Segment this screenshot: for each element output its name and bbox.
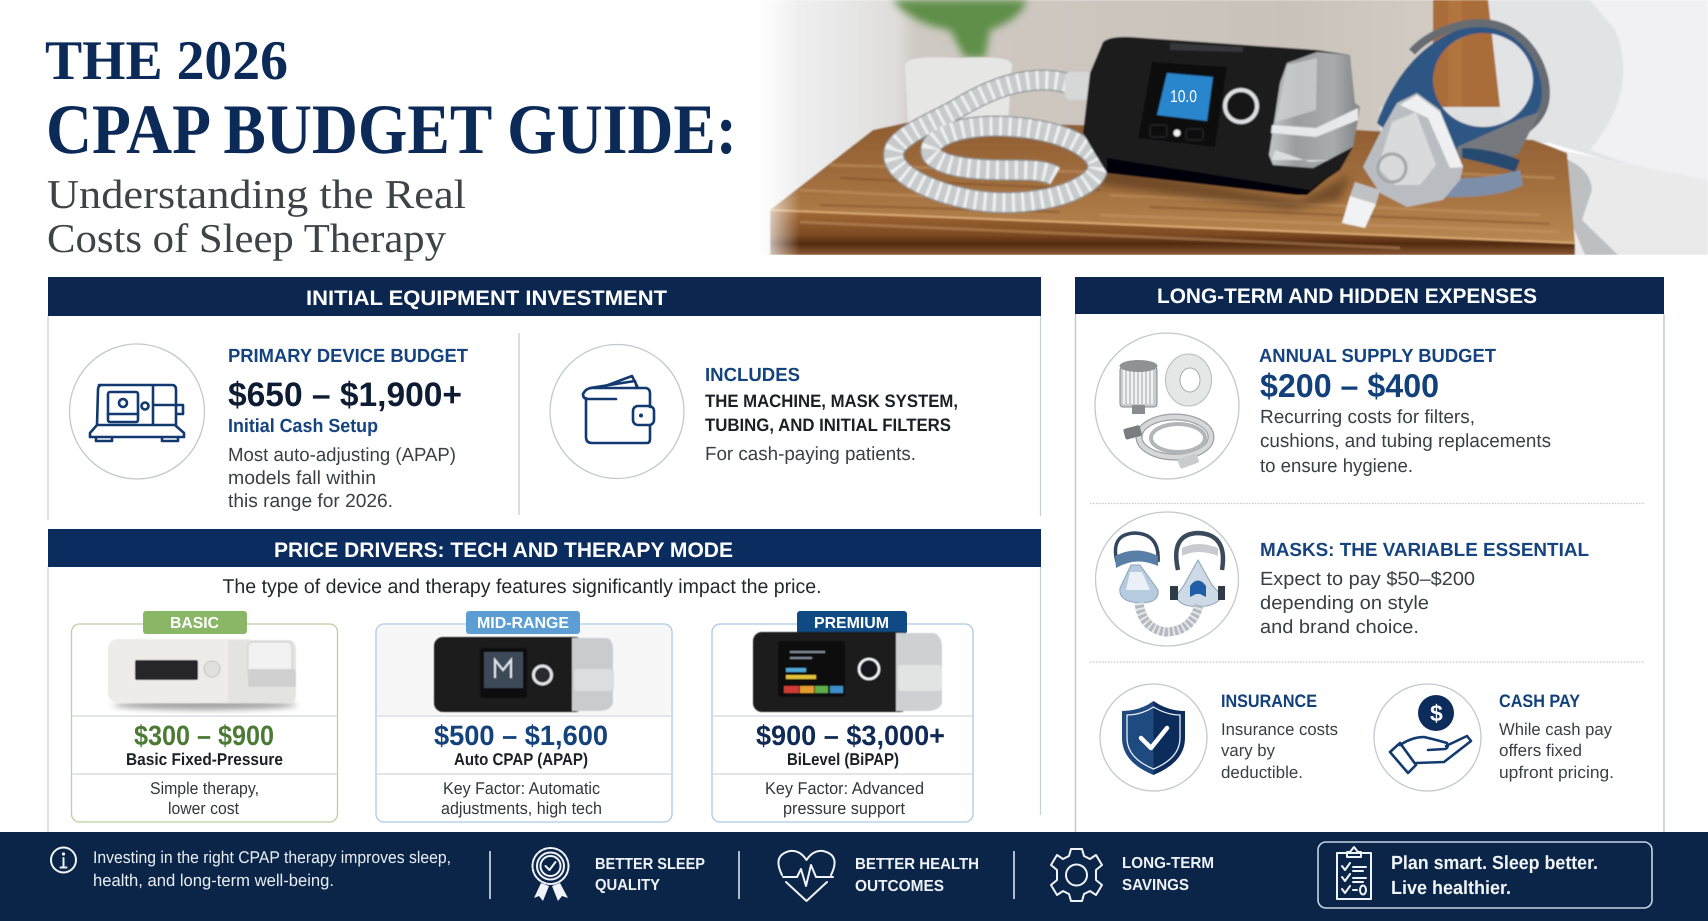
price: $650 – $1,900+ — [228, 376, 462, 414]
masks block — [1096, 512, 1589, 646]
included items — [705, 391, 958, 435]
mask headgear — [1377, 23, 1546, 150]
description: this range for 2026. — [228, 491, 393, 512]
description — [1260, 407, 1551, 477]
heading bar — [48, 529, 1041, 567]
description — [1260, 569, 1475, 638]
description: models fall within — [228, 468, 376, 489]
key factor — [441, 779, 602, 818]
description — [228, 445, 456, 512]
device image: black auto CPAP machine — [434, 637, 614, 712]
benefit: savings: LONG-TERM — [1122, 855, 1214, 872]
icon: heart with pulse — [778, 851, 835, 901]
badge — [466, 611, 580, 634]
key factor — [765, 779, 924, 818]
dial — [1225, 90, 1257, 122]
screen reading: 10.0 — [1170, 87, 1197, 106]
machine shadow — [1095, 165, 1350, 210]
icon: wallet — [550, 344, 684, 478]
mask elbow — [1350, 182, 1380, 204]
description: Most auto-adjusting (APAP) — [228, 445, 456, 466]
footer message: Investing in the right CPAP therapy improves sleep, — [93, 848, 451, 867]
included items: THE MACHINE, MASK SYSTEM, — [705, 391, 958, 411]
icon: filter, cushion and tubing — [1095, 333, 1239, 479]
panel: initial equipment investment — [48, 277, 1041, 520]
label: INCLUDES — [705, 365, 800, 386]
subtitle — [47, 171, 466, 261]
panel: price drivers — [48, 529, 1041, 833]
label: PRIMARY DEVICE BUDGET — [228, 346, 468, 367]
device image: white fixed-pressure machine — [108, 639, 297, 710]
panel: long-term and hidden expenses — [1075, 277, 1664, 833]
includes block — [550, 344, 958, 478]
key factor: adjustments, high tech — [441, 799, 602, 818]
cash pay block — [1374, 684, 1614, 791]
description: vary by — [1221, 741, 1275, 760]
center divider — [518, 333, 520, 515]
hero photo: CPAP machine on nightstand — [740, 0, 1708, 255]
description: offers fixed — [1499, 741, 1582, 760]
mode: BiLevel (BiPAP) — [787, 750, 899, 769]
badge: MID-RANGE — [477, 615, 569, 632]
title line 2: CPAP BUDGET GUIDE: — [46, 91, 737, 169]
callout text — [1391, 853, 1598, 899]
CPAP machine — [1083, 37, 1360, 195]
mode: Basic Fixed-Pressure — [126, 750, 283, 769]
photo left fade — [740, 0, 800, 255]
header title block — [45, 30, 737, 261]
key factor: lower cost — [168, 799, 239, 818]
benefit: savings: SAVINGS — [1122, 877, 1189, 894]
key factor — [150, 779, 259, 818]
badge — [797, 611, 907, 634]
heading bar — [1075, 277, 1664, 314]
icon: CPAP device — [70, 344, 204, 479]
primary device block — [70, 344, 468, 512]
description: depending on style — [1260, 593, 1429, 614]
benefit: health: BETTER HEALTH — [855, 856, 979, 873]
table front face — [770, 210, 1575, 255]
label: INSURANCE — [1221, 691, 1317, 711]
badge: BASIC — [170, 615, 219, 632]
footer band — [0, 832, 1708, 921]
callout: plan smart — [1318, 842, 1652, 908]
price: $200 – $400 — [1260, 367, 1439, 404]
icon: two CPAP masks with hose — [1096, 512, 1238, 646]
sublabel: Initial Cash Setup — [228, 416, 378, 437]
benefit: health — [855, 856, 979, 895]
panel borders — [1076, 314, 1664, 833]
wall — [770, 0, 1434, 254]
label: ANNUAL SUPPLY BUDGET — [1259, 346, 1496, 367]
key factor: Key Factor: Advanced — [765, 779, 924, 798]
heading text: LONG-TERM AND HIDDEN EXPENSES — [1157, 285, 1537, 308]
benefit: sleep: QUALITY — [595, 877, 660, 894]
badge — [143, 611, 247, 634]
subtitle: Costs of Sleep Therapy — [47, 215, 447, 261]
price: $300 – $900 — [134, 720, 274, 751]
description: Insurance costs — [1221, 720, 1338, 739]
mask shell — [1363, 93, 1463, 207]
price: $900 – $3,000+ — [756, 720, 945, 751]
panel borders — [48, 567, 1040, 833]
icon: hand with dollar coin — [1374, 684, 1481, 791]
description: cushions, and tubing replacements — [1260, 431, 1551, 452]
mode: Auto CPAP (APAP) — [454, 750, 588, 769]
description — [1221, 720, 1338, 782]
mask strap — [1443, 170, 1523, 197]
badge: PREMIUM — [814, 615, 889, 632]
label: MASKS: THE VARIABLE ESSENTIAL — [1260, 540, 1589, 561]
humidifier tank — [1269, 52, 1360, 168]
table top — [770, 122, 1575, 243]
card: mid-range — [376, 611, 672, 822]
icon: information — [51, 848, 76, 872]
footer message — [93, 848, 451, 890]
icon: checklist clipboard — [1337, 847, 1371, 899]
description: deductible. — [1221, 763, 1303, 782]
description: Recurring costs for filters, — [1260, 407, 1475, 428]
description: Expect to pay $50–$200 — [1260, 569, 1475, 590]
callout text: Plan smart. Sleep better. — [1391, 853, 1598, 874]
intro sentence: The type of device and therapy features significantly impact the price. — [222, 576, 822, 598]
description: While cash pay — [1499, 720, 1612, 739]
heading text: PRICE DRIVERS: TECH AND THERAPY MODE — [274, 539, 733, 562]
benefit: health: OUTCOMES — [855, 878, 944, 895]
description: to ensure hygiene. — [1260, 456, 1413, 477]
bedroom backdrop — [1380, 0, 1708, 255]
panel borders — [48, 316, 1040, 520]
icon: award ribbon — [532, 848, 568, 901]
annual supply block — [1095, 333, 1551, 479]
note: For cash-paying patients. — [705, 444, 916, 465]
hose — [894, 72, 1098, 203]
key factor: Key Factor: Automatic — [443, 779, 600, 798]
included items: TUBING, AND INITIAL FILTERS — [705, 415, 951, 435]
screen bezel — [1138, 62, 1227, 147]
blue screen — [1157, 73, 1213, 121]
subtitle: Understanding the Real — [47, 171, 466, 217]
label: CASH PAY — [1499, 691, 1580, 711]
price: $500 – $1,600 — [434, 720, 608, 751]
insurance block — [1100, 684, 1338, 791]
key factor: Simple therapy, — [150, 779, 259, 798]
benefit: savings — [1122, 855, 1214, 894]
card: premium — [712, 611, 973, 822]
device image: black BiLevel machine with colour screen — [753, 632, 942, 712]
card: basic — [72, 611, 338, 822]
plant and pot — [892, 0, 1027, 125]
icon: hand with dollar coin: $ — [1430, 700, 1443, 726]
footer message: health, and long-term well-being. — [93, 871, 334, 890]
description — [1499, 720, 1614, 782]
key factor: pressure support — [783, 799, 905, 818]
description: upfront pricing. — [1499, 763, 1614, 782]
title line 1: THE 2026 — [45, 30, 288, 92]
heading bar — [48, 277, 1041, 316]
buttons — [1150, 125, 1167, 137]
benefit: sleep — [595, 856, 705, 894]
icon: shield with check — [1100, 684, 1207, 791]
description: and brand choice. — [1260, 617, 1419, 638]
icon: gear — [1051, 849, 1102, 901]
callout text: Live healthier. — [1391, 878, 1511, 899]
heading text: INITIAL EQUIPMENT INVESTMENT — [306, 287, 667, 310]
benefit: sleep: BETTER SLEEP — [595, 856, 705, 873]
